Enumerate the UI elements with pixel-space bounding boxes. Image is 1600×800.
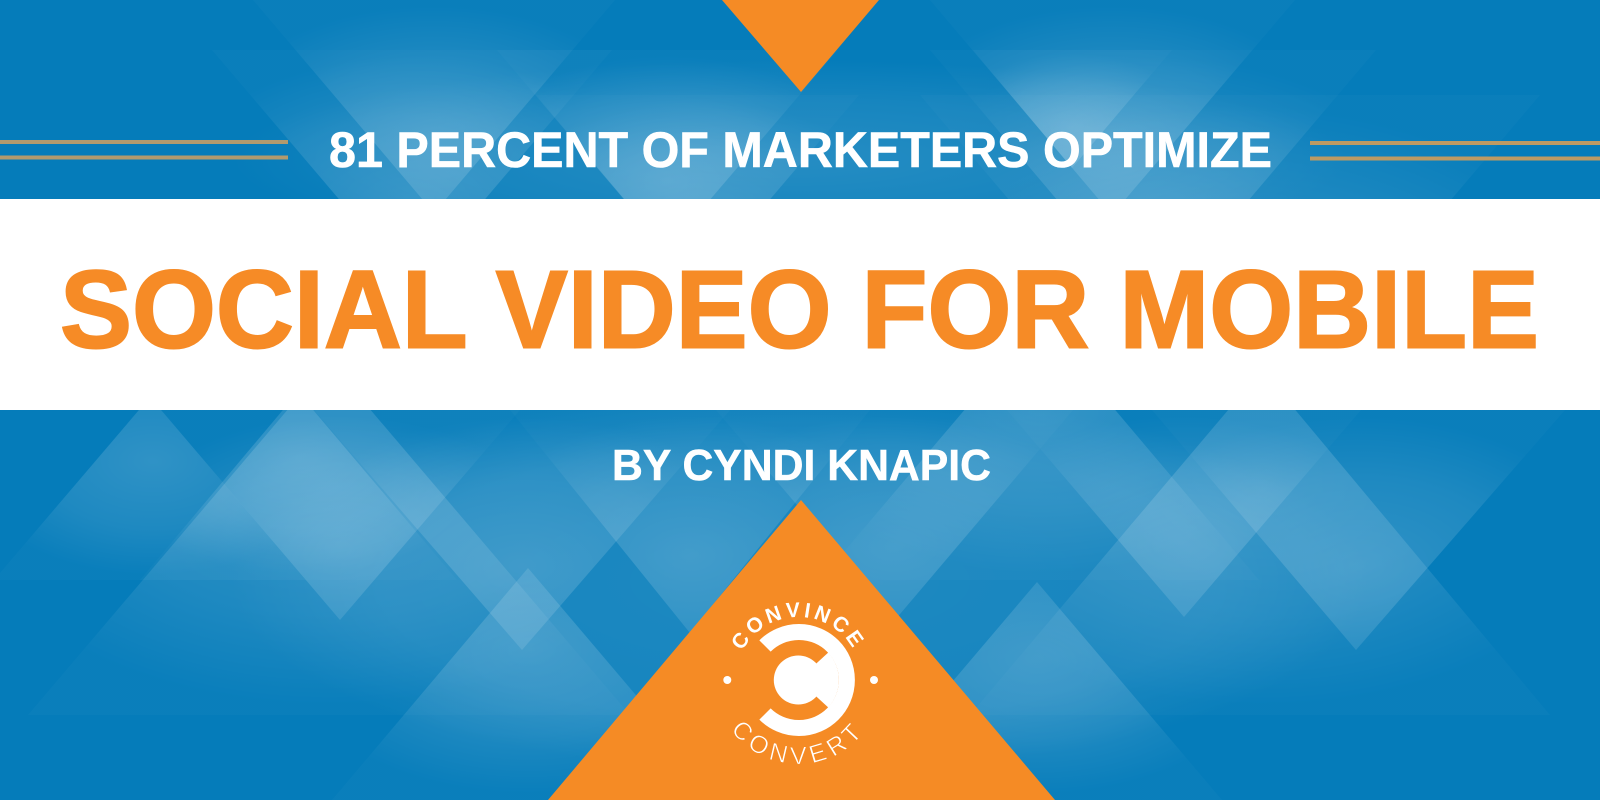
byline: BY CYNDI KNAPIC: [612, 441, 991, 490]
logo C mark: [765, 632, 847, 728]
top orange triangle: [722, 0, 879, 92]
logo text: convince: CONVINCE: [732, 602, 864, 648]
bottom triangle pattern: [31, 410, 1518, 784]
white title band: [0, 199, 1600, 410]
logo dots: [723, 676, 878, 684]
main title: SOCIAL VIDEO FOR MOBILE: [60, 248, 1539, 372]
logo: Convince and Convert: [723, 602, 878, 764]
left double rule: [0, 140, 288, 160]
logo text: convert: CONVERT: [734, 722, 858, 764]
top triangle pattern: [258, 16, 1470, 199]
right double rule: [1310, 141, 1600, 160]
subtitle: 81 PERCENT OF MARKETERS OPTIMIZE: [329, 122, 1272, 178]
bottom orange triangle: [548, 500, 1055, 800]
